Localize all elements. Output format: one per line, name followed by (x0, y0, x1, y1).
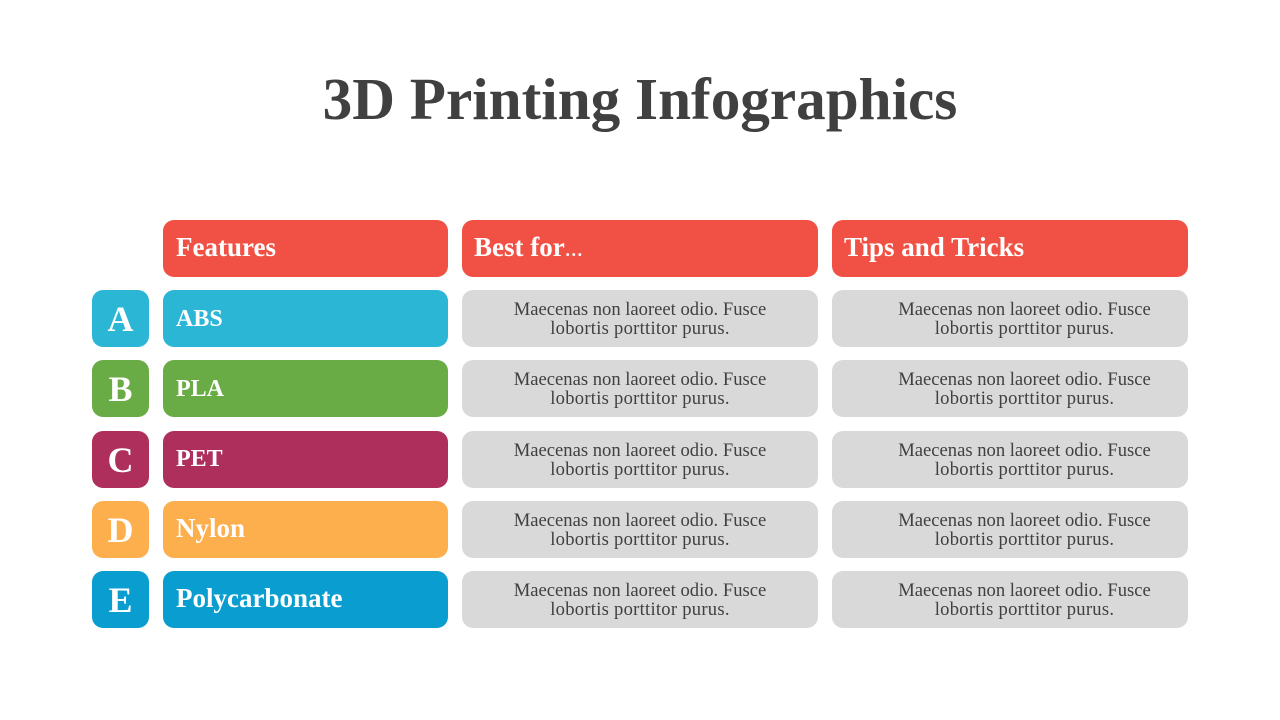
best for text: PLA: Maecenas non laoreet odio. Fusce (514, 369, 766, 390)
badge: C: C (108, 440, 134, 480)
tips text: PLA: Maecenas non laoreet odio. Fusce (898, 369, 1151, 390)
badge: A: A (108, 299, 134, 339)
badge: A (92, 290, 149, 347)
best for text: ABS (462, 290, 818, 347)
tips text: ABS: lobortis porttitor purus. (935, 318, 1114, 339)
tips text: PLA: lobortis porttitor purus. (935, 388, 1114, 409)
header: Tips and Tricks (832, 220, 1188, 277)
title: 3D Printing Infographics (323, 66, 957, 132)
best for text: Polycarbonate: Maecenas non laoreet odio. Fusce (514, 580, 766, 601)
badge: B (92, 360, 149, 417)
tips text: Polycarbonate: lobortis porttitor purus. (935, 599, 1114, 620)
feature: PLA (163, 360, 448, 417)
feature: ABS (163, 290, 448, 347)
tips text: ABS (832, 290, 1188, 347)
feature: PLA: PLA (176, 376, 224, 402)
best for text: Polycarbonate (462, 571, 818, 628)
header: Features (163, 220, 448, 277)
feature: ABS: ABS (176, 306, 223, 332)
feature: Nylon (163, 501, 448, 558)
best for text: PLA: lobortis porttitor purus. (550, 388, 730, 409)
tips text: Nylon: lobortis porttitor purus. (935, 529, 1114, 550)
tips text: Polycarbonate (832, 571, 1188, 628)
best for text: Nylon: Maecenas non laoreet odio. Fusce (514, 510, 766, 531)
tips text: PLA (832, 360, 1188, 417)
badge: E: E (108, 580, 132, 620)
badge: B: B (108, 369, 132, 409)
best for text: Nylon (462, 501, 818, 558)
best for text: Polycarbonate: lobortis porttitor purus. (550, 599, 730, 620)
badge: E (92, 571, 149, 628)
best for text: Nylon: lobortis porttitor purus. (550, 529, 730, 550)
header: Best for (462, 220, 818, 277)
best for text: ABS: Maecenas non laoreet odio. Fusce (514, 299, 766, 320)
feature: Polycarbonate (163, 571, 448, 628)
badge: D: D (108, 510, 134, 550)
best for text: ABS: lobortis porttitor purus. (550, 318, 730, 339)
feature: Polycarbonate: Polycarbonate (176, 583, 342, 613)
tips text: PET: Maecenas non laoreet odio. Fusce (898, 440, 1151, 461)
best for text: PLA (462, 360, 818, 417)
feature: Nylon: Nylon (176, 513, 245, 543)
tips text: Nylon (832, 501, 1188, 558)
feature: PET: PET (176, 446, 223, 472)
tips text: Polycarbonate: Maecenas non laoreet odio. Fusce (898, 580, 1151, 601)
best for text: PET: Maecenas non laoreet odio. Fusce (514, 440, 766, 461)
tips text: Nylon: Maecenas non laoreet odio. Fusce (898, 510, 1151, 531)
header: Features: Features (176, 232, 276, 262)
tips text: PET: lobortis porttitor purus. (935, 459, 1114, 480)
header: Tips and Tricks: Tips and Tricks (844, 232, 1024, 262)
header: Best for: Best for… (474, 232, 583, 262)
tips text: ABS: Maecenas non laoreet odio. Fusce (898, 299, 1151, 320)
badge: D (92, 501, 149, 558)
feature: PET (163, 431, 448, 488)
best for text: PET (462, 431, 818, 488)
badge: C (92, 431, 149, 488)
best for text: PET: lobortis porttitor purus. (550, 459, 730, 480)
tips text: PET (832, 431, 1188, 488)
